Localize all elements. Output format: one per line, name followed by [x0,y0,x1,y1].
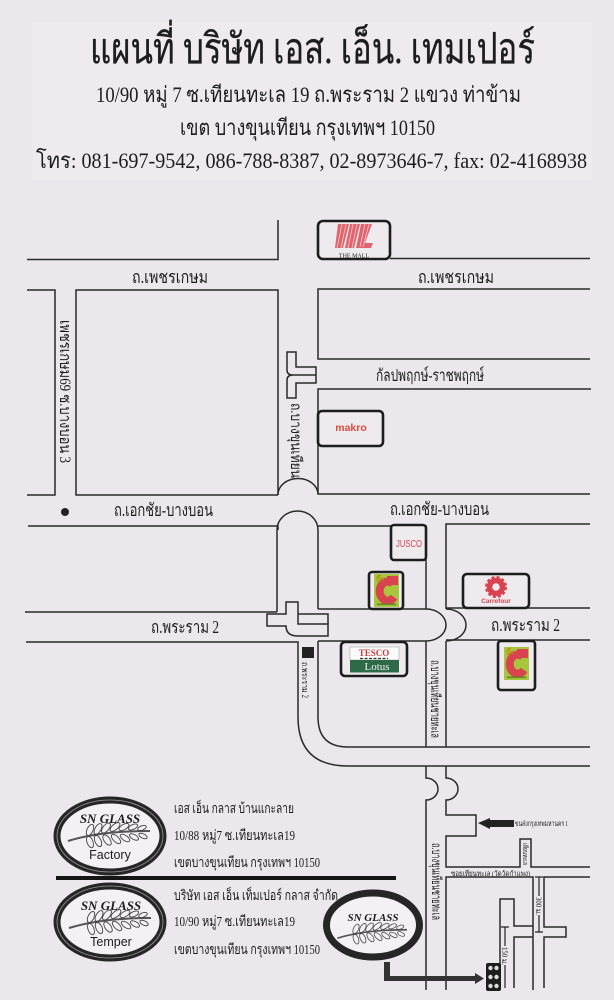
black square marker [302,647,314,658]
address line 1: 10/90 หมู่ 7 ซ.เทียนทะเล 19 ถ.พระราม 2 แขวง ท่าข้าม [96,82,521,108]
road labels: ถ.เพชรเกษม [418,267,494,287]
road labels: ถ.บางขุนเทียนชายทะเล [428,843,444,920]
distance marker: 300 m [534,877,543,932]
temper address [174,886,338,958]
road map [25,220,591,990]
road labels: ถ.เอกชัย-บางบอน [390,499,489,519]
road labels: ซอยเทียนทะเล (วัดวัดกำแพง) [451,869,530,878]
landmark: Tesco Lotus: TESCO [359,648,389,658]
logo: SN Glass location: SN GLASS [347,912,399,924]
road labels: ถ.เพชรเกษม [132,267,208,287]
logo: SN Glass Temper: SN GLASS [81,898,141,913]
road labels [56,267,560,920]
icon: company building [486,963,501,991]
road labels: ถ.พระราม 2 [491,615,560,635]
landmark: The Mall [318,221,390,260]
logo: SN Glass Factory [57,800,163,872]
road labels: กัลปพฤกษ์-ราชพฤกษ์ [376,366,484,385]
logo: SN Glass location [326,893,420,957]
roads lower section [426,766,590,990]
landmark: Carrefour [463,574,529,608]
arrow: logo to company location [384,962,484,984]
logo: SN Glass Factory: Factory [89,848,132,862]
header [32,20,592,180]
landmark: Big C south [498,641,535,690]
distance marker: 150 m: 150 ม. [500,947,509,965]
arrow: bus terminal: ขนส่งกรุงเทพมหานคร 1 [515,819,568,828]
road labels: ถ.พระราม 2 [300,662,310,698]
landmark: Tesco Lotus: Lotus [364,661,390,673]
distance marker: 150 m [500,927,509,988]
distance marker: 300 m: 300 ม. [534,897,543,915]
logo: SN Glass Temper: Temper [90,935,132,949]
factory address: 10/88 หมู่7 ซ.เทียนทะเล19 [174,828,295,844]
road labels: ถ.พระราม 2 [151,617,219,637]
roads middle section [25,511,590,766]
logo: SN Glass Factory: SN GLASS [80,811,140,826]
roads upper section [27,220,591,495]
temper address: เขตบางขุนเทียน กรุงเทพฯ 10150 [174,942,320,958]
road labels: ถ.เอกชัย-บางบอน [114,500,213,520]
road labels: ถ.บางขุนเทียนชายทะเล [427,660,443,738]
logo: SN Glass Temper [57,886,163,958]
landmark: The Mall: THE MALL [339,254,369,260]
landmark: Makro [318,411,383,446]
road labels: ถ.บางขุนเทียน [286,403,304,478]
landmark: Big C north [369,572,403,609]
landmark: Carrefour: Carrefour [481,598,511,605]
landmark: Jusco: JUSCO [396,539,422,550]
landmark: Jusco [391,525,426,560]
road labels: เพชรเกษม69 ซ.บางบอน 3 [56,320,73,463]
temper address: 10/90 หมู่7 ซ.เทียนทะเล19 [174,914,295,930]
marker dot [61,508,69,516]
road labels: เทียนทะเล [521,843,529,865]
address line 2: เขต บางขุนเทียน กรุงเทพฯ 10150 [180,115,435,141]
temper address: บริษัท เอส เอ็น เท็มเปอร์ กลาส จำกัด [174,886,338,904]
divider line [56,876,396,880]
factory address: เขตบางขุนเทียน กรุงเทพฯ 10150 [174,855,320,871]
landmark: Tesco Lotus [341,642,407,676]
landmark: Makro: makro [335,422,367,434]
factory address [174,799,320,871]
arrow: bus terminal [478,818,568,829]
factory address: เอส เอ็น กลาส บ้านแกะลาย [174,799,294,817]
